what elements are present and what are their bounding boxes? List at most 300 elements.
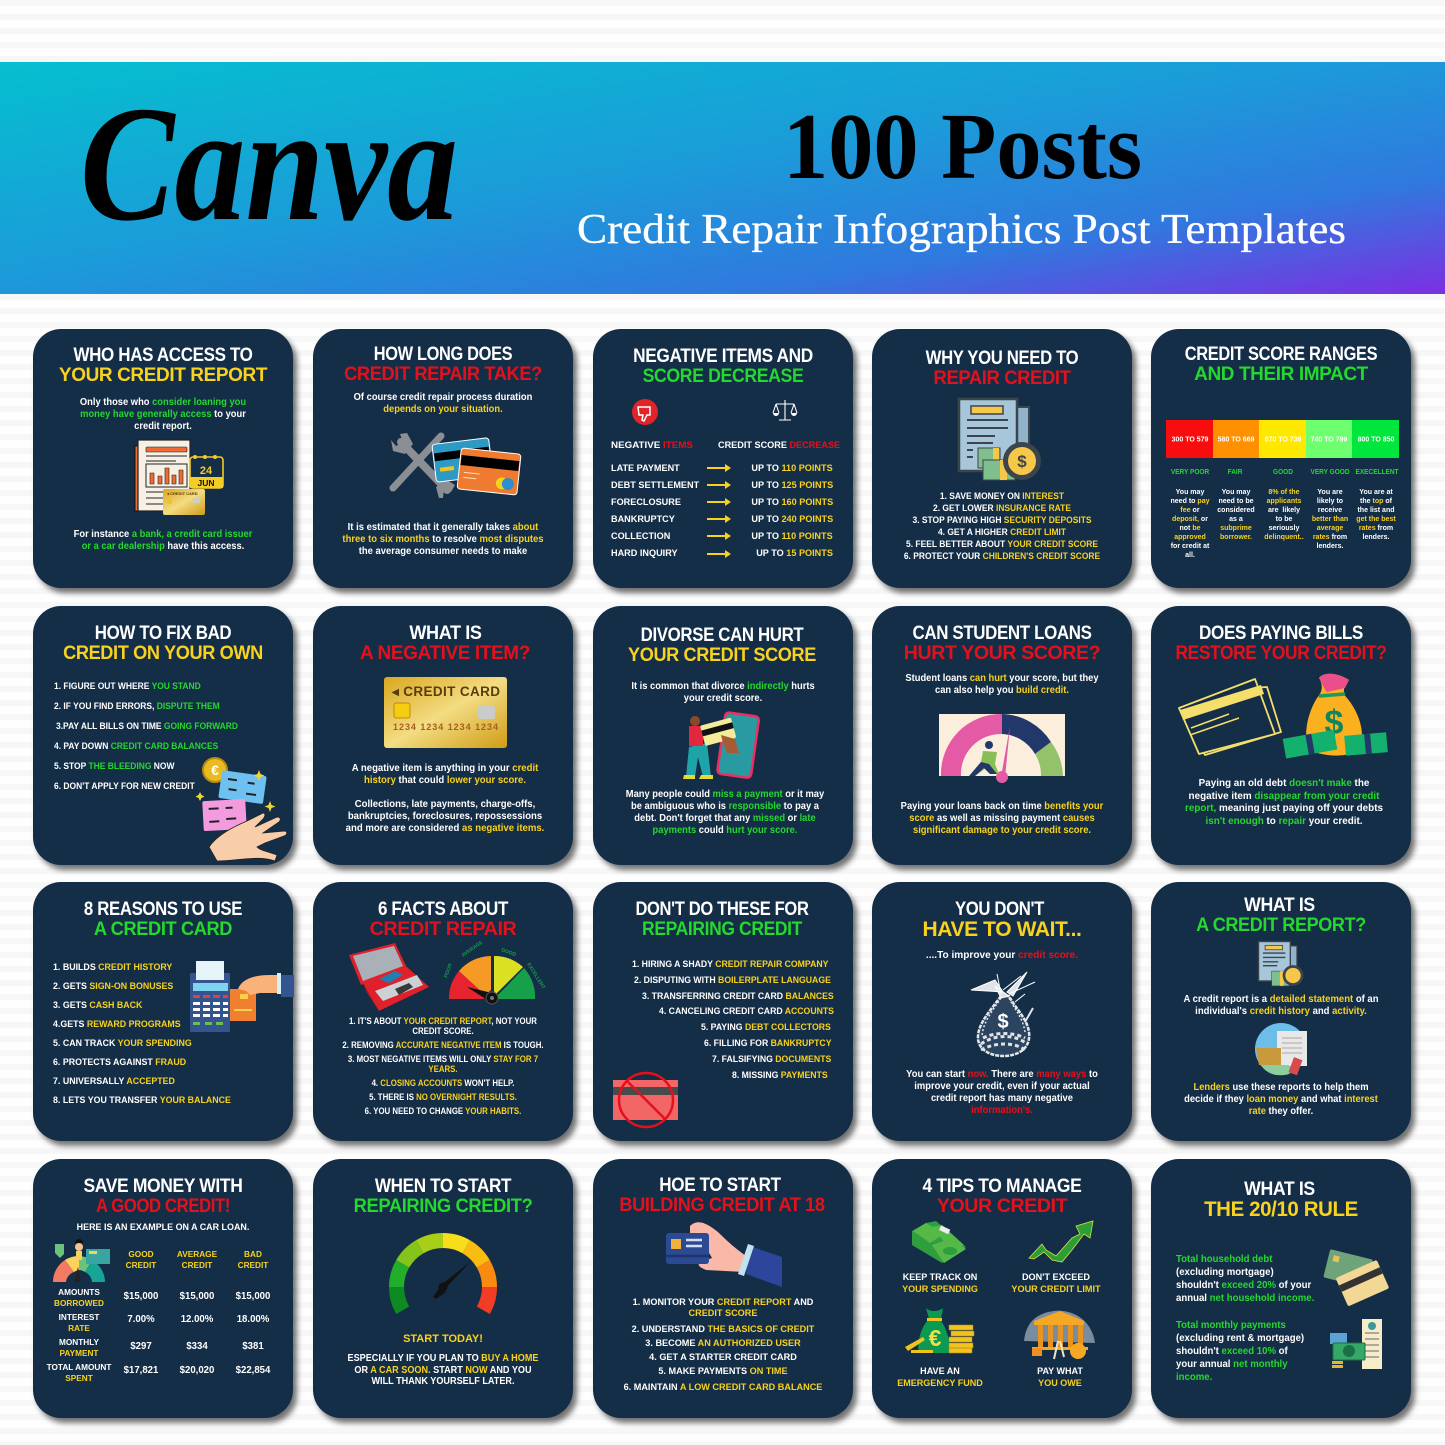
icon: hand with cards and coin bbox=[196, 757, 288, 862]
table: car loan: BORROWED bbox=[54, 1298, 104, 1308]
icon: sketched money bag: $ bbox=[997, 1011, 1009, 1033]
panel: credit score ranges bbox=[1151, 329, 1411, 588]
icon: score gauge: POOR bbox=[443, 962, 454, 979]
table header: NEGATIVE ITEMS bbox=[611, 440, 693, 451]
heading: NEGATIVE ITEMS AND bbox=[633, 346, 813, 366]
icon: tools and cards bbox=[390, 432, 522, 498]
panel: divorce bbox=[593, 606, 853, 865]
text block bbox=[1165, 1081, 1397, 1117]
table: negative items: DEBT SETTLEMENT bbox=[611, 480, 699, 491]
text block: credit report. bbox=[134, 420, 192, 432]
label bbox=[931, 1272, 1181, 1296]
table: car loan: GOOD bbox=[128, 1249, 154, 1259]
score columns bbox=[1170, 467, 1399, 559]
heading bbox=[33, 1176, 293, 1218]
icon: thumbs down bbox=[632, 399, 658, 425]
score columns: the list and bbox=[1357, 505, 1395, 514]
heading: HOW TO FIX BAD bbox=[95, 622, 231, 644]
numbered list: 5. STOP THE BLEEDING NOW bbox=[54, 761, 174, 772]
numbered list: 6. FILLING FOR BANKRUPTCY bbox=[704, 1038, 831, 1049]
label: YOU OWE bbox=[1038, 1378, 1082, 1389]
heading: CAN STUDENT LOANS bbox=[912, 622, 1092, 644]
score columns: You may bbox=[1222, 487, 1250, 496]
icon: euro money bag bbox=[905, 1307, 975, 1355]
icon: toolbox bbox=[349, 943, 431, 1013]
panel: 20/10 rule bbox=[1151, 1159, 1411, 1418]
heading: THE 20/10 RULE bbox=[1204, 1198, 1358, 1221]
heading: SAVE MONEY WITH bbox=[84, 1176, 242, 1196]
text block: debt. Don't forget that any missed or late bbox=[634, 812, 816, 824]
icon: hand holding card bbox=[666, 1220, 782, 1287]
heading: CREDIT SCORE RANGES bbox=[1185, 344, 1377, 364]
numbered list: 2. GETS SIGN-ON BONUSES bbox=[53, 981, 173, 992]
heading: DIVORSE CAN HURT bbox=[641, 624, 803, 646]
heading bbox=[313, 1176, 573, 1218]
text block: OR A CAR SOON. START NOW AND YOU bbox=[354, 1365, 532, 1376]
score columns: approved bbox=[1174, 532, 1206, 541]
numbered list: 1. IT'S ABOUT YOUR CREDIT REPORT, NOT YOUR bbox=[349, 1016, 537, 1026]
table: negative items: LATE PAYMENT bbox=[611, 463, 680, 474]
numbered list: 1. HIRING A SHADY CREDIT REPAIR COMPANY bbox=[632, 959, 828, 970]
text block: ....To improve your credit score. bbox=[926, 949, 1078, 961]
score columns: You may bbox=[1176, 487, 1204, 496]
score columns: lenders. bbox=[1317, 541, 1343, 550]
score columns: FAIR bbox=[1228, 467, 1242, 476]
panel: save money bbox=[33, 1159, 293, 1418]
heading: DOES PAYING BILLS bbox=[1199, 622, 1363, 644]
heading bbox=[84, 898, 242, 940]
table: car loan: $15,000 bbox=[124, 1291, 158, 1302]
table: negative items: COLLECTION bbox=[611, 531, 670, 542]
text block: A negative item is anything in your credit bbox=[352, 762, 538, 774]
icon: report with calendar and card: JUN bbox=[197, 478, 215, 488]
text block: income. bbox=[1176, 1371, 1212, 1383]
score columns: are likely bbox=[1268, 505, 1300, 514]
table: car loan: 18.00% bbox=[237, 1314, 269, 1325]
score columns: considered bbox=[1217, 505, 1255, 514]
score columns: not be bbox=[1179, 523, 1201, 532]
text block: score as well as missing payment causes bbox=[909, 812, 1095, 824]
heading: CREDIT ON YOUR OWN bbox=[63, 643, 263, 664]
heading bbox=[872, 1176, 1132, 1218]
score columns: need to be bbox=[1218, 496, 1254, 505]
heading: YOUR CREDIT bbox=[937, 1196, 1067, 1217]
score columns: You are at bbox=[1359, 487, 1393, 496]
heading bbox=[1151, 1180, 1411, 1220]
text block: It is estimated that it generally takes about bbox=[348, 521, 538, 533]
text block: Lenders use these reports to help them bbox=[1193, 1081, 1369, 1093]
text block: bankruptcies, foreclosures, repossessions bbox=[348, 810, 542, 822]
text block: shouldn't exceed 10% of bbox=[1176, 1345, 1288, 1357]
text block: Paying an old debt doesn't make the bbox=[1199, 777, 1369, 789]
panel: who has access bbox=[33, 329, 293, 588]
icon: report illustration bbox=[1255, 1022, 1309, 1076]
text block: Total monthly payments bbox=[1176, 1319, 1286, 1331]
score columns: to be bbox=[1276, 514, 1292, 523]
score columns: rates from bbox=[1359, 523, 1393, 532]
text block: decide if they loan money and what interest bbox=[1184, 1093, 1378, 1105]
table: negative items: UP TO 240 POINTS bbox=[751, 514, 833, 525]
text block: your credit score. bbox=[684, 692, 762, 704]
label: PAY WHAT bbox=[1037, 1366, 1083, 1377]
score columns: all. bbox=[1185, 550, 1195, 559]
heading: A CREDIT REPORT? bbox=[1196, 915, 1366, 936]
text block: history that could lower your score. bbox=[364, 774, 526, 786]
heading bbox=[633, 346, 813, 387]
subheading: HERE IS AN EXAMPLE ON A CAR LOAN. bbox=[77, 1222, 249, 1233]
icon: rising money arrow bbox=[1028, 1220, 1094, 1262]
table: car loan bbox=[33, 1249, 293, 1384]
score columns: GOOD bbox=[1273, 467, 1293, 476]
heading: REPAIRING CREDIT? bbox=[354, 1196, 532, 1217]
heading: CREDIT REPAIR bbox=[370, 919, 516, 940]
icon: score gauge: GOOD bbox=[500, 947, 517, 958]
numbered list: 2. IF YOU FIND ERRORS, DISPUTE THEM bbox=[54, 701, 220, 712]
icon: gold credit card: 1234 1234 1234 1234 bbox=[393, 722, 498, 732]
heading: YOU DON'T bbox=[955, 898, 1044, 920]
text block: your annual net monthly bbox=[1176, 1358, 1288, 1370]
heading: WHEN TO START bbox=[375, 1176, 511, 1196]
bar chart: score ranges bbox=[1166, 420, 1399, 458]
heading: AND THEIR IMPACT bbox=[1194, 364, 1368, 385]
numbered list: 2. GET LOWER INSURANCE RATE bbox=[933, 503, 1071, 514]
label bbox=[936, 1366, 1184, 1390]
text block: Of course credit repair process duration bbox=[354, 391, 532, 403]
panel: six facts: AVERAGE bbox=[461, 939, 485, 959]
table: car loan: $17,821 bbox=[124, 1365, 158, 1376]
panel: paying bills bbox=[1151, 606, 1411, 865]
heading: WHO HAS ACCESS TO bbox=[73, 344, 253, 366]
score columns: seriously bbox=[1269, 523, 1299, 532]
text block: You can start now. There are many ways to bbox=[906, 1068, 1098, 1080]
table: car loan: TOTAL AMOUNT bbox=[47, 1362, 111, 1372]
panel: why repair bbox=[872, 329, 1132, 588]
numbered list: 7. FALSIFYING DOCUMENTS bbox=[712, 1054, 831, 1065]
heading: WHAT IS bbox=[1244, 894, 1315, 916]
text block: isn't enough to repair your credit. bbox=[1205, 815, 1363, 827]
text block: information's. bbox=[971, 1104, 1033, 1116]
numbered list: 1. MONITOR YOUR CREDIT REPORT AND bbox=[633, 1297, 813, 1308]
table: car loan: INTEREST bbox=[59, 1312, 99, 1322]
text block bbox=[1176, 1253, 1314, 1305]
score columns: deposit, or bbox=[1172, 514, 1208, 523]
table: car loan: SPENT bbox=[65, 1372, 93, 1382]
text block bbox=[354, 391, 532, 415]
table: negative items bbox=[611, 463, 833, 559]
heading: YOUR CREDIT REPORT bbox=[59, 365, 267, 386]
icon: report with calendar and card: 24 bbox=[200, 465, 213, 477]
text block: improve your credit, even if your actual bbox=[914, 1080, 1090, 1092]
heading: A NEGATIVE ITEM? bbox=[360, 643, 530, 664]
heading: YOUR CREDIT SCORE bbox=[628, 645, 816, 666]
heading: A CREDIT CARD bbox=[94, 919, 232, 940]
panel: student loans bbox=[872, 606, 1132, 865]
text block: Many people could miss a payment or it may bbox=[626, 788, 824, 800]
text block: (excluding mortgage) bbox=[1176, 1266, 1274, 1278]
panel: negative items bbox=[593, 329, 853, 588]
subtitle: Credit Repair Infographics Post Templates bbox=[577, 207, 1346, 253]
numbered list bbox=[53, 961, 233, 1105]
numbered list: CREDIT SCORE. 2. REMOVING ACCURATE NEGATIVE ITEM IS TOUGH. 3. MOST NEGATIVE ITEMS WILL ONLY STAY FOR 7 bbox=[342, 1026, 544, 1064]
heading: HAVE TO WAIT... bbox=[923, 918, 1081, 941]
numbered list: 4. PAY DOWN CREDIT CARD BALANCES bbox=[54, 741, 218, 752]
icon: bank building bbox=[1024, 1307, 1096, 1360]
table: car loan: MONTHLY bbox=[59, 1337, 99, 1347]
icon: prohibited card bbox=[613, 1072, 679, 1130]
bar chart: score ranges: 300 TO 579 bbox=[1172, 436, 1209, 444]
text block: For instance a bank, a credit card issuer bbox=[74, 528, 252, 540]
text block: the average consumer needs to make bbox=[359, 545, 527, 557]
table: car loan: RATE bbox=[68, 1322, 90, 1332]
heading bbox=[593, 1176, 853, 1216]
label bbox=[816, 1366, 1064, 1390]
heading: HOW LONG DOES bbox=[374, 344, 512, 364]
text block: and more are considered as negative items. bbox=[346, 822, 544, 834]
panel: don't wait bbox=[872, 882, 1132, 1141]
numbered list: 1. FIGURE OUT WHERE YOU STAND bbox=[54, 681, 201, 692]
table: car loan: $22,854 bbox=[236, 1365, 270, 1376]
bar chart: score ranges: 580 TO 669 bbox=[1218, 436, 1255, 444]
text block: It is common that divorce indirectly hurts bbox=[631, 680, 815, 692]
icon: hand with cards and coin: € bbox=[211, 762, 219, 778]
text block: significant damage to your credit score. bbox=[913, 824, 1091, 836]
score columns: VERY GOOD bbox=[1310, 467, 1350, 476]
heading: REPAIRING CREDIT bbox=[642, 919, 802, 940]
panel: four tips bbox=[872, 1159, 1132, 1418]
icon: gold credit card bbox=[384, 677, 507, 748]
gauge bbox=[383, 1227, 503, 1327]
label: DON'T EXCEED bbox=[1022, 1272, 1090, 1283]
label: YOUR CREDIT LIMIT bbox=[1011, 1284, 1101, 1295]
numbered list bbox=[904, 491, 1100, 562]
title: 100 Posts: 100 Posts bbox=[783, 95, 1142, 199]
heading bbox=[593, 900, 853, 940]
heading: 6 FACTS ABOUT bbox=[378, 898, 508, 920]
table: car loan: $297 bbox=[130, 1341, 152, 1352]
text block bbox=[886, 1068, 1118, 1116]
text block bbox=[80, 396, 246, 432]
heading: RESTORE YOUR CREDIT? bbox=[1175, 643, 1387, 664]
text block bbox=[346, 798, 544, 834]
table: negative items: FORECLOSURE bbox=[611, 497, 681, 508]
numbered list: 3. TRANSFERRING CREDIT CARD BALANCES bbox=[642, 991, 834, 1002]
text block: report, meaning just paying off your debts bbox=[1185, 802, 1383, 814]
heading: 8 REASONS TO USE bbox=[84, 898, 242, 920]
text block: credit report has many negative bbox=[931, 1092, 1073, 1104]
icon: sketched money bag bbox=[965, 972, 1041, 1058]
text block: A credit report is a detailed statement of an bbox=[1183, 993, 1379, 1005]
numbered list: 3. GETS CASH BACK bbox=[53, 1000, 142, 1011]
table: car loan: BAD bbox=[244, 1249, 262, 1259]
table: car loan: $381 bbox=[242, 1341, 264, 1352]
table: car loan: $334 bbox=[186, 1341, 208, 1352]
heading: HURT YOUR SCORE? bbox=[904, 643, 1100, 664]
score columns: get the best bbox=[1356, 514, 1396, 523]
icon: document and coin bbox=[1258, 941, 1304, 987]
score columns: the top of bbox=[1360, 496, 1392, 505]
heading bbox=[1185, 344, 1377, 385]
icon: card and money bag: $ bbox=[1325, 704, 1344, 742]
icon: cash, coins and receipt bbox=[1330, 1319, 1384, 1371]
text block: Only those who consider loaning you bbox=[80, 396, 246, 408]
text block: three to six months to resolve most disputes bbox=[342, 533, 544, 545]
score columns: for credit at bbox=[1171, 541, 1209, 550]
numbered list bbox=[330, 1016, 556, 1116]
text block: (excluding rent & mortgage) bbox=[1176, 1332, 1304, 1344]
text block bbox=[352, 762, 538, 786]
bar chart: score ranges: 800 TO 850 bbox=[1358, 436, 1395, 444]
text block bbox=[1176, 1319, 1304, 1384]
table: negative items: BANKRUPTCY bbox=[611, 514, 675, 525]
callout: START TODAY! bbox=[403, 1333, 483, 1345]
heading bbox=[59, 344, 268, 386]
table: negative items: UP TO 160 POINTS bbox=[751, 497, 833, 508]
icon: score gauge: EXCELLENT bbox=[525, 962, 546, 990]
text block: shouldn't exceed 20% of your bbox=[1176, 1279, 1311, 1291]
heading: BUILDING CREDIT AT 18 bbox=[619, 1195, 825, 1216]
icon: card and money bag bbox=[1178, 674, 1388, 758]
numbered list: 4. CANCELING CREDIT CARD ACCOUNTS bbox=[659, 1006, 834, 1017]
panel: six facts bbox=[313, 882, 573, 1141]
score columns: receive bbox=[1318, 505, 1342, 514]
table: car loan: $20,020 bbox=[180, 1365, 214, 1376]
numbered list: 7. UNIVERSALLY ACCEPTED bbox=[53, 1076, 175, 1087]
heading bbox=[313, 900, 573, 940]
heading bbox=[872, 900, 1132, 940]
icon: document and coin bbox=[958, 398, 1041, 480]
numbered list: 5. FEEL BETTER ABOUT YOUR CREDIT SCORE bbox=[906, 539, 1098, 550]
table: car loan: AVERAGE bbox=[177, 1249, 217, 1259]
heading: 4 TIPS TO MANAGE bbox=[923, 1176, 1081, 1196]
text block bbox=[626, 788, 824, 836]
score columns: as a bbox=[1229, 514, 1243, 523]
text block bbox=[325, 1353, 561, 1388]
table: car loan: CREDIT bbox=[182, 1260, 212, 1270]
score columns: borrower. bbox=[1220, 532, 1252, 541]
text block: Collections, late payments, charge-offs, bbox=[355, 798, 535, 810]
score columns: average bbox=[1317, 523, 1343, 532]
numbered list: 5. CAN TRACK YOUR SPENDING bbox=[53, 1038, 192, 1049]
numbered list: 6. PROTECT YOUR CHILDREN'S CREDIT SCORE bbox=[904, 551, 1100, 562]
text block: annual net household income. bbox=[1176, 1292, 1314, 1304]
table: car loan: CREDIT bbox=[238, 1260, 268, 1270]
panel: reasons bbox=[33, 882, 293, 1141]
numbered list: 4.GETS REWARD PROGRAMS bbox=[53, 1019, 181, 1030]
heading: HOE TO START bbox=[659, 1174, 781, 1196]
table: negative items: UP TO 15 POINTS bbox=[756, 548, 833, 559]
score columns: 8% of the bbox=[1268, 487, 1300, 496]
icon: document and coin: $ bbox=[1017, 452, 1027, 471]
table: car loan: 12.00% bbox=[181, 1314, 213, 1325]
icon: gold credit card: ◂ CREDIT CARD bbox=[391, 684, 500, 699]
table: car loan: $15,000 bbox=[180, 1291, 214, 1302]
text block bbox=[342, 521, 544, 557]
text block: depends on your situation. bbox=[383, 403, 503, 415]
heading: DON'T DO THESE FOR bbox=[635, 898, 809, 920]
table: car loan: $15,000 bbox=[236, 1291, 270, 1302]
table: negative items: UP TO 110 POINTS bbox=[752, 463, 833, 474]
score columns: fee or bbox=[1180, 505, 1200, 514]
text block: rate they offer. bbox=[1249, 1105, 1313, 1117]
numbered list: 6. DON'T APPLY FOR NEW CREDIT bbox=[54, 781, 195, 792]
heading: WHY YOU NEED TO bbox=[926, 348, 1078, 368]
icon: euro money bag: € bbox=[929, 1325, 942, 1351]
score columns: EXECELLENT bbox=[1355, 467, 1399, 476]
icon: report with calendar and card bbox=[134, 440, 224, 515]
text block bbox=[631, 680, 815, 704]
table: negative items: UP TO 110 POINTS bbox=[752, 531, 833, 542]
table: car loan: AMOUNTS bbox=[58, 1287, 100, 1297]
brand wordmark: Canva: Canva bbox=[80, 72, 458, 255]
numbered list: 1. BUILDS CREDIT HISTORY bbox=[53, 962, 172, 973]
label bbox=[816, 1272, 1064, 1296]
heading: WHAT IS bbox=[1244, 1178, 1315, 1200]
heading bbox=[1175, 622, 1387, 664]
score columns: lenders. bbox=[1363, 532, 1389, 541]
text block: Paying your loans back on time benefits your bbox=[901, 800, 1103, 812]
text block: negative item disappear from your credit bbox=[1189, 790, 1379, 802]
score columns: You are bbox=[1317, 487, 1343, 496]
icon: report with calendar and card: ◂ CREDIT CARD bbox=[166, 491, 198, 496]
text block: individual's credit history and activity. bbox=[1195, 1005, 1367, 1017]
text block: be ambiguous who is responsible to pay a bbox=[631, 800, 819, 812]
heading bbox=[360, 622, 530, 664]
label: HAVE AN bbox=[920, 1366, 960, 1377]
score columns: delinquent.. bbox=[1264, 532, 1304, 541]
heading: SCORE DECREASE bbox=[643, 366, 803, 387]
icon: gauge with person bbox=[939, 714, 1065, 783]
panel: when to start bbox=[313, 1159, 573, 1418]
text block bbox=[1163, 993, 1399, 1017]
heading: CREDIT REPAIR TAKE? bbox=[344, 364, 542, 385]
icon: two cards bbox=[1324, 1247, 1388, 1303]
panel: fix bad credit bbox=[33, 606, 293, 865]
score columns: VERY POOR bbox=[1171, 467, 1209, 476]
icon: person on gauge bbox=[52, 1239, 110, 1283]
bar chart: score ranges: 670 TO 739 bbox=[1265, 436, 1302, 444]
table: car loan: PAYMENT bbox=[60, 1348, 98, 1358]
text block bbox=[74, 528, 252, 552]
heading bbox=[926, 348, 1078, 389]
text block: ESPECIALLY IF YOU PLAN TO BUY A HOME bbox=[348, 1353, 538, 1364]
table: negative items: HARD INQUIRY bbox=[611, 548, 678, 559]
panel: building credit bbox=[593, 1159, 853, 1418]
icon: payment terminal bbox=[190, 961, 294, 1033]
numbered list: 2. DISPUTING WITH BOILERPLATE LANGUAGE bbox=[634, 975, 831, 986]
text block: Total household debt bbox=[1176, 1253, 1272, 1265]
panel: negative item bbox=[313, 606, 573, 865]
heading: A GOOD CREDIT! bbox=[96, 1196, 230, 1217]
score columns: better than bbox=[1312, 514, 1348, 523]
text block: money have generally access to your bbox=[80, 408, 246, 420]
table header right: CREDIT SCORE DECREASE bbox=[718, 440, 840, 451]
numbered list: 8. LETS YOU TRANSFER YOUR BALANCE bbox=[53, 1095, 231, 1106]
numbered list: 6. PROTECTS AGAINST FRAUD bbox=[53, 1057, 186, 1068]
text block: payments could hurt your score. bbox=[653, 824, 797, 836]
label: YOUR SPENDING bbox=[902, 1284, 978, 1295]
numbered list bbox=[593, 958, 853, 1082]
numbered list: CREDIT SCORE 2. UNDERSTAND THE BASICS OF CREDIT 3. BECOME AN AUTHORIZED USER 4. GET A STARTER CREDIT CARD 5. MAKE PAYMENTS ON TIME 6. MAINTAIN A LOW CREDIT CARD BALANCE bbox=[624, 1308, 822, 1393]
heading: WHAT IS bbox=[409, 622, 482, 644]
text block: or a car dealership have this access. bbox=[82, 540, 244, 552]
score columns: subprime bbox=[1220, 523, 1252, 532]
label: EMERGENCY FUND bbox=[897, 1378, 983, 1389]
numbered list: 5. PAYING DEBT COLLECTORS bbox=[701, 1022, 831, 1033]
icon: cash stack bbox=[912, 1221, 968, 1265]
text block bbox=[905, 672, 1099, 696]
label: KEEP TRACK ON bbox=[903, 1272, 977, 1283]
heading bbox=[344, 344, 542, 385]
